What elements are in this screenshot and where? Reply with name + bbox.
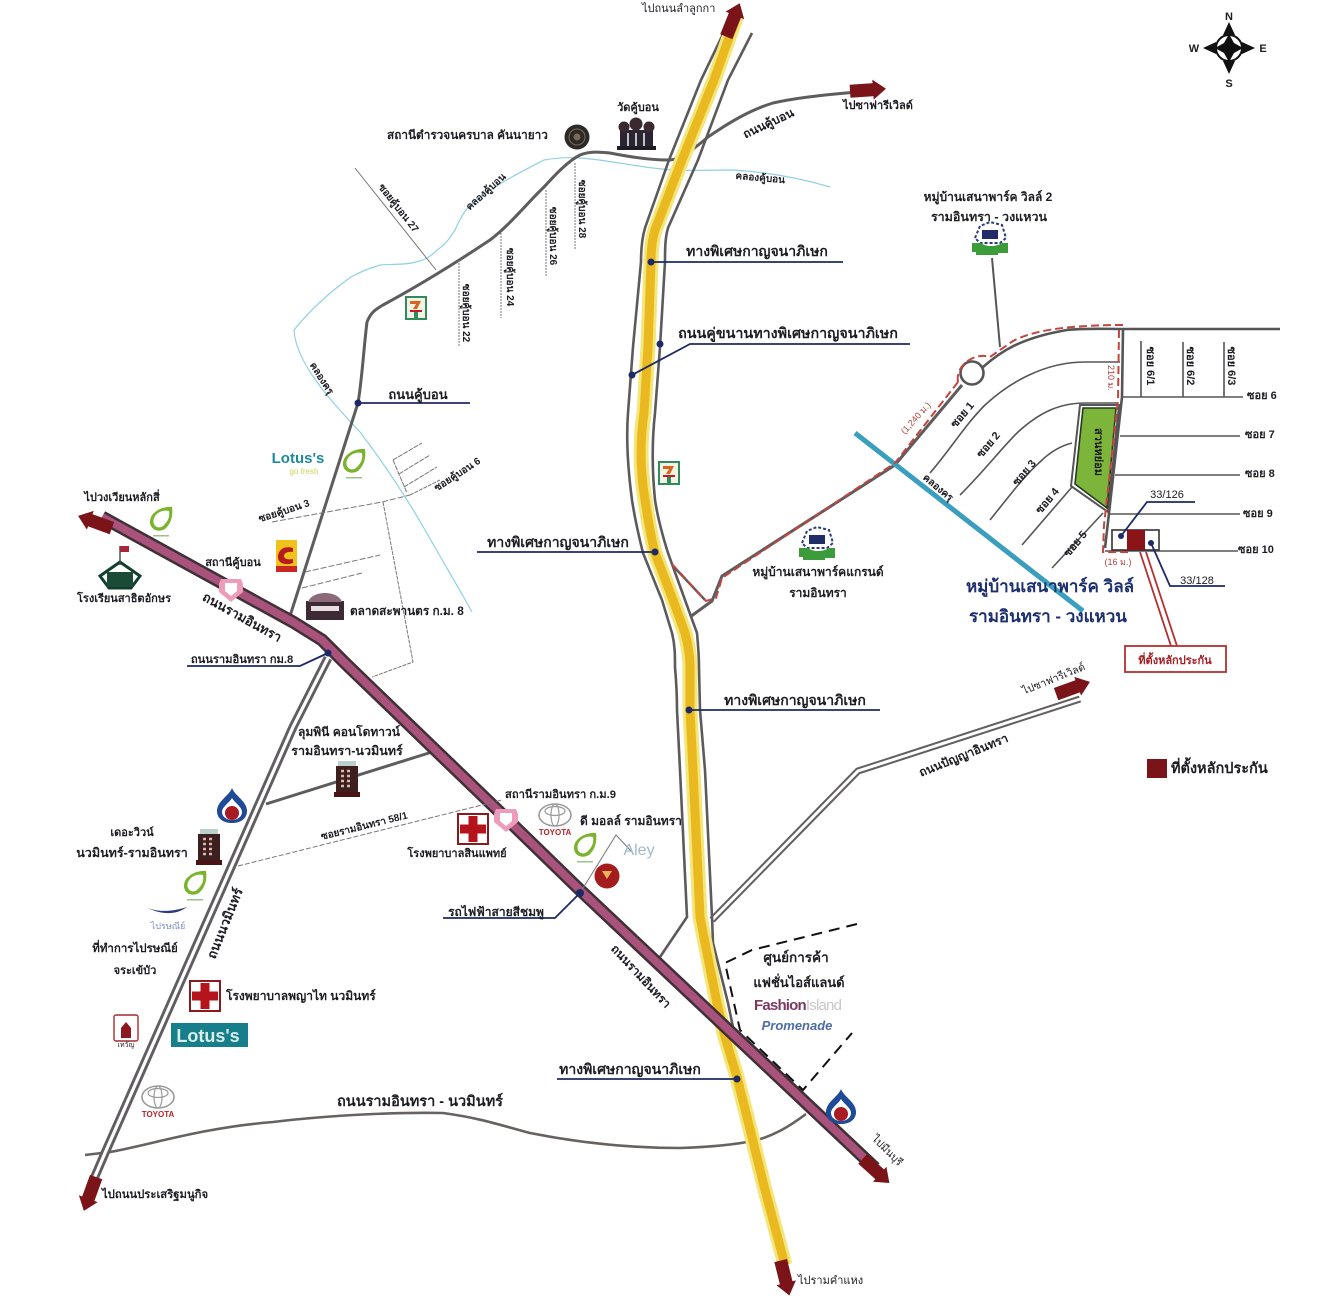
label: Lumpini Condo Town: ลุมพินี คอนโดทาวน์ — [298, 724, 401, 740]
arrow: to Min Buri — [856, 1152, 896, 1190]
label: The View: นวมินทร์-รามอินทรา — [76, 845, 188, 860]
label: Soi Khu Bon 6: ซอยคู้บอน 6 — [432, 455, 484, 495]
road: Nawamin double carriageway — [90, 658, 328, 1188]
soi labels: ซอย 1 — [949, 400, 977, 430]
label: Sena Park Ville 2: หมู่บ้านเสนาพาร์ค วิลล์ 2 — [924, 190, 1053, 205]
label: Ramindra road east: ถนนรามอินทรา — [608, 942, 674, 1011]
road: expressway frontage roads — [627, 30, 752, 1037]
logo: Toyota Ramindra — [539, 804, 572, 837]
arrow: to Prasert Manukit — [74, 1174, 106, 1214]
label: Soi Khu Bon 28: ซอยคู้บอน 28 — [575, 180, 588, 239]
soi labels: ซอย 10 — [1238, 544, 1274, 556]
label: Sena Park Ville 2: รามอินทรา - วงแหวน — [931, 210, 1047, 224]
icon: Khu Bon station — [219, 579, 243, 602]
icon: Sena Park Ville 2 — [972, 222, 1008, 255]
callout: expressway 3 — [686, 692, 880, 714]
callout: 33/128 — [1148, 540, 1225, 587]
callout: Pink line — [443, 889, 584, 920]
icon: PTT west — [217, 788, 247, 823]
canal: Khlong Khru teal line — [855, 433, 1083, 611]
icon: leaf north — [343, 449, 365, 478]
label: Phyathai hospital: โรงพยาบาลพญาไท นวมินทร์ — [225, 988, 376, 1003]
logo: Aley: Aley — [623, 842, 655, 859]
icon: compass rose: S — [1225, 78, 1233, 90]
side lanes: thin soi lines — [238, 163, 632, 893]
label: Khu Bon canal east: คลองคู้บอน — [735, 170, 786, 187]
icon: Phyathai hospital — [190, 981, 220, 1011]
legend: collateral location — [1147, 757, 1268, 778]
soi labels: ซอย 7 — [1245, 429, 1275, 441]
icon: compass rose: N — [1225, 11, 1233, 23]
icon: school — [100, 546, 140, 588]
soi labels: ซอย 8 — [1245, 468, 1275, 480]
road: Khu Bon road west and east — [290, 92, 858, 616]
label: Lumpini Condo Town — [291, 724, 403, 758]
icon: leaf west — [150, 507, 172, 536]
park — [1071, 405, 1119, 512]
soi labels: ซอย 6/3 — [1225, 347, 1237, 385]
callout: 33/128: 33/128 — [1180, 575, 1214, 587]
arrow: to Lak Si circle — [75, 506, 115, 538]
label: Synphaet hospital: โรงพยาบาลสินแพทย์ — [406, 846, 507, 860]
icon: leaf Ramindra — [574, 833, 596, 862]
logo: Toyota Ramindra: TOYOTA — [539, 828, 572, 837]
callout: collateral location — [1125, 552, 1226, 672]
callout: parallel road: ถนนคู่ขนานทางพิเศษกาญจนาภิเษก — [678, 325, 898, 342]
callout: Khu Bon road — [354, 387, 470, 406]
label: Khan Na Yao police station: สถานีตำรวจนครบาล คันนายาว — [387, 128, 548, 142]
route: red dashed to property — [672, 325, 1128, 601]
icon: temple — [617, 118, 656, 150]
label: The View — [76, 826, 188, 860]
icon: Synphaet hospital — [458, 814, 488, 844]
soi labels: ซอย 6/1 — [1144, 347, 1156, 385]
icon: small market: เทวัญ — [118, 1041, 134, 1049]
road: Panya Indra double carriageway — [712, 699, 1080, 920]
icon: Sena Park Grand — [799, 527, 835, 560]
arrow: to Ram Khamhaeng — [771, 1258, 799, 1298]
title: project name: รามอินทรา - วงแหวน — [969, 607, 1127, 626]
callout: expressway 2 — [477, 534, 658, 556]
soi labels: ซอย 6/2 — [1184, 347, 1196, 385]
soi labels: ซอย 4 — [1034, 485, 1062, 516]
icon: Ramindra km 9 station — [494, 809, 518, 832]
label: Ramindra-Nawamin road: ถนนรามอินทรา - นวมินทร์ — [337, 1092, 503, 1110]
callout: expressway 4 — [557, 1061, 740, 1082]
label: to Lam Luk Ka: ไปถนนลำลูกกา — [641, 2, 715, 15]
village roads — [930, 329, 1280, 568]
icon: 7-Eleven north — [406, 297, 426, 319]
label: post office — [92, 939, 178, 977]
callout: expressway 1 — [648, 243, 843, 266]
label: Fashion Island: แฟชั่นไอส์แลนด์ — [753, 973, 845, 990]
icon: red badge — [594, 864, 620, 888]
label: The View: เดอะวิวน์ — [110, 826, 154, 839]
label: Soi Ramindra 58/1: ซอยรามอินทรา 58/1 — [320, 809, 409, 843]
route distance labels: (1,240 ม.) — [899, 400, 933, 436]
icon: 7-Eleven centre — [659, 462, 679, 484]
road: Ramindra-Navamin connector — [85, 1113, 806, 1155]
label: The Mall Ramindra: ดี มอลล์ รามอินทรา — [580, 814, 682, 828]
label: Fashion Island — [753, 949, 845, 990]
label: to Ram Khamhaeng: ไปรามคำแหง — [797, 1274, 863, 1287]
soi labels: ซอย 5 — [1062, 529, 1090, 559]
label: Sena Park Grand: หมู่บ้านเสนาพาร์คแกรนด์ — [752, 565, 884, 580]
road: expressway side spur — [675, 568, 705, 600]
logo: Fashion Island: FashionIsland — [754, 997, 842, 1014]
soi labels: ซอย 9 — [1243, 508, 1273, 520]
logo: Thailand Post — [148, 907, 187, 931]
logo: Lotus's Nawamin — [171, 1023, 248, 1047]
connector: Sena Park Ville 2 — [992, 258, 1000, 347]
label: Khlong Khru (east): คลองครุ — [920, 472, 955, 504]
route distance labels: 210 ม. — [1106, 365, 1116, 391]
callout: Pink line: รถไฟฟ้าสายสีชมพู — [448, 904, 544, 920]
road: Kanchanaphisek expressway (yellow) — [641, 15, 785, 1265]
logo: Toyota Nawamin: TOYOTA — [142, 1110, 175, 1119]
label: post office: ที่ทำการไปรษณีย์ — [92, 939, 178, 955]
label: to Min Buri: ไปมีนบุรี — [869, 1132, 906, 1169]
callout: 33/126: 33/126 — [1150, 489, 1184, 501]
soi labels — [949, 347, 1277, 559]
logo: Promenade: Promenade — [762, 1018, 832, 1033]
label: Soi Khu Bon 3: ซอยคู้บอน 3 — [257, 497, 312, 526]
label: Ramindra km 9 station: สถานีรามอินทรา ก.ม.9 — [505, 788, 616, 801]
road: Ramindra (pink) — [102, 517, 875, 1168]
label: Sena Park Grand — [752, 565, 884, 600]
label: Fashion Island: ศูนย์การค้า — [763, 949, 829, 966]
callout: collateral location: ที่ตั้งหลักประกัน — [1138, 652, 1212, 667]
icon: Big C — [276, 540, 297, 572]
title: project name: หมู่บ้านเสนาพาร์ค วิลล์ — [966, 576, 1134, 598]
callout: 33/126 — [1118, 489, 1195, 539]
label: to Lak Si circle: ไปวงเวียนหลักสี่ — [82, 489, 160, 504]
icon: compass rose: W — [1189, 43, 1200, 55]
route distance labels: (16 ม.) — [1105, 557, 1131, 567]
label: fresh market: ตลาดสะพานตร ก.ม. 8 — [350, 604, 464, 618]
road: condo link — [266, 752, 432, 804]
icon: police badge — [564, 124, 590, 150]
soi labels: ซอย 2 — [975, 430, 1003, 460]
logo: Lotus's north: go fresh — [290, 467, 318, 476]
label: Panya Indra road: ถนนปัญญาอินทรา — [917, 731, 1010, 780]
callout: expressway 4: ทางพิเศษกาญจนาภิเษก — [559, 1061, 701, 1078]
area: Fashion Island dashed boundary — [725, 924, 857, 1090]
label: Soi Khu Bon 22: ซอยคู้บอน 22 — [459, 284, 472, 343]
soi labels: ซอย 6 — [1247, 390, 1277, 402]
panel: Sena Park Ville village plan — [672, 325, 1280, 601]
water: canal Khlong Khu Bon — [294, 158, 830, 612]
label: Khu Bon road east: ถนนคู้บอน — [741, 105, 797, 142]
callout: parallel road — [628, 325, 910, 378]
label: school: โรงเรียนสาธิตอักษร — [76, 591, 171, 605]
label: to Safari World: ไปซาฟารีเวิลด์ — [841, 98, 913, 112]
logo: Lotus's north — [272, 450, 324, 476]
soi labels: สวนหย่อม — [1092, 428, 1104, 476]
label: Sena Park Grand: รามอินทรา — [789, 586, 847, 600]
label: to Prasert Manukit: ไปถนนประเสริฐมนูกิจ — [100, 1187, 208, 1202]
label: Khu Bon station: สถานีคู้บอน — [205, 556, 261, 570]
label: Lumpini Condo Town: รามอินทรา-นวมินทร์ — [291, 743, 403, 758]
arrow: to Lam Luk Ka — [717, 0, 749, 40]
label: Nawamin road: ถนนนวมินทร์ — [204, 886, 246, 961]
icon: Lumpini condo — [334, 761, 360, 797]
label: Sena Park Ville 2 — [924, 190, 1053, 224]
label: to Safari World south: ไปซาฟารีเวิลด์ — [1019, 660, 1087, 698]
label: Ramindra road west: ถนนรามอินทรา — [200, 589, 284, 645]
logo: Lotus's north: Lotus's — [272, 450, 324, 467]
icon: PTT east — [826, 1089, 856, 1124]
label: Soi Khu Bon 24: ซอยคู้บอน 24 — [503, 248, 516, 307]
icon: The View condo — [196, 829, 222, 865]
callout: Khu Bon road: ถนนคู้บอน — [388, 387, 448, 403]
icon: small market — [114, 1015, 138, 1049]
label: Wat Khu Bon: วัดคู้บอน — [617, 101, 659, 115]
logo: Thailand Post: ไปรษณีย์ — [150, 920, 185, 931]
callout: expressway 3: ทางพิเศษกาญจนาภิเษก — [724, 692, 866, 709]
callout: expressway 2: ทางพิเศษกาญจนาภิเษก — [487, 534, 629, 551]
icon: fresh market — [306, 593, 344, 620]
label: Soi Khu Bon 27: ซอยคู้บอน 27 — [375, 181, 421, 236]
icon: leaf Nawamin — [184, 871, 206, 900]
icon: compass rose — [1189, 11, 1267, 90]
property plot — [1112, 530, 1159, 550]
label: Khlong Khru west: คลองครุ — [307, 361, 336, 397]
label: Khu Bon canal west: คลองคู้บอน — [464, 171, 509, 214]
arrow: to Safari World north — [849, 79, 887, 101]
soi labels: ซอย 3 — [1011, 458, 1039, 488]
label: Soi Khu Bon 26: ซอยคู้บอน 26 — [546, 207, 559, 266]
label: post office: จระเข้บัว — [114, 964, 156, 977]
callout: Ramindra km 8 — [187, 650, 332, 666]
icon: compass rose: E — [1259, 43, 1267, 55]
logo: Toyota Nawamin — [142, 1086, 175, 1119]
road: branch to Sena Park Grand — [690, 385, 962, 617]
title: project name — [966, 576, 1134, 626]
callout: Ramindra km 8: ถนนรามอินทรา กม.8 — [191, 653, 293, 666]
arrow: to Safari World south — [1053, 672, 1093, 704]
legend: collateral location: ที่ตั้งหลักประกัน — [1171, 757, 1268, 777]
logo: Lotus's Nawamin: Lotus's — [176, 1026, 240, 1046]
callout: expressway 1: ทางพิเศษกาญจนาภิเษก — [686, 243, 828, 260]
roundabout — [960, 362, 984, 384]
route distance labels — [899, 365, 1131, 567]
